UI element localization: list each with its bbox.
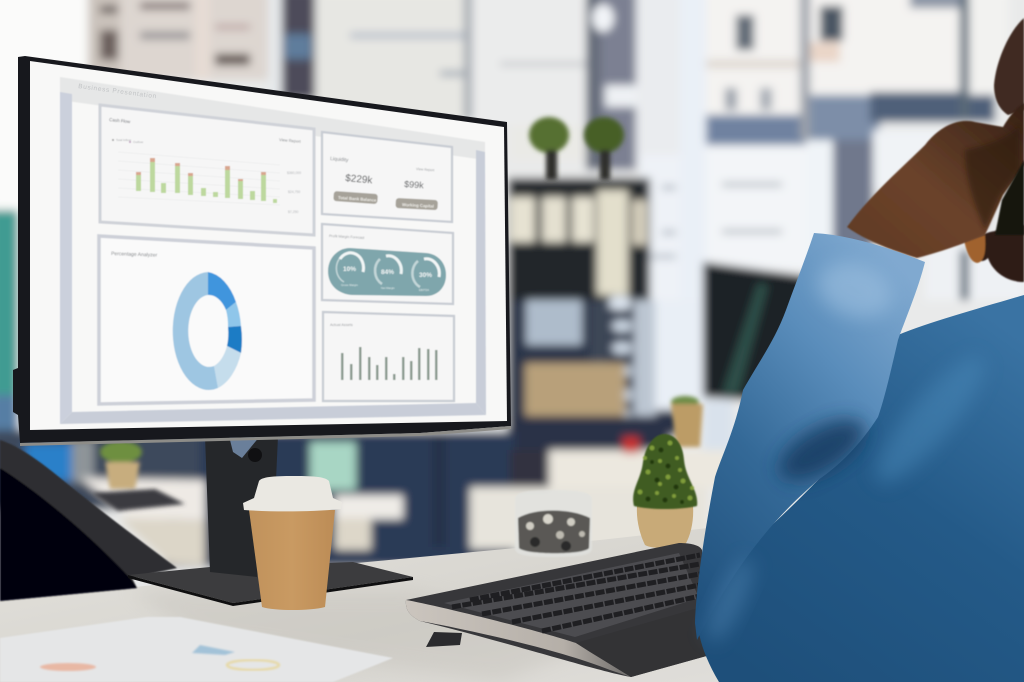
button: working capital: Working Capital bbox=[402, 202, 434, 209]
back desks bbox=[80, 478, 205, 520]
view report label: View Report bbox=[416, 167, 435, 172]
value: total bank balance: $229k bbox=[345, 173, 374, 186]
stand neck bbox=[205, 436, 278, 577]
gauge 1: Gross Margin bbox=[341, 283, 358, 287]
chart side values bbox=[287, 171, 301, 214]
legend bbox=[112, 138, 144, 144]
panel: percentage analyzer bbox=[99, 236, 314, 404]
paper donut chart bbox=[227, 660, 279, 670]
cable opening bbox=[229, 436, 260, 458]
cup body bbox=[249, 510, 335, 610]
dark keyboard on back desk bbox=[92, 489, 185, 511]
pot bbox=[637, 506, 693, 548]
cup lid bbox=[243, 476, 342, 511]
foliage bbox=[633, 434, 697, 509]
dashboard frame bbox=[60, 77, 486, 424]
wrist rest bbox=[576, 608, 710, 677]
panel: profit margin bbox=[322, 224, 453, 304]
panel: liquidity bbox=[322, 132, 452, 222]
gauge 1 bbox=[336, 253, 364, 287]
potted plants on shelf bbox=[529, 117, 624, 180]
small plant left background bbox=[100, 441, 142, 489]
bookshelf bbox=[508, 178, 650, 303]
keyboard bbox=[406, 543, 710, 677]
sleeve fold shadow bbox=[769, 407, 875, 493]
stand base bbox=[128, 562, 413, 603]
monitor bbox=[13, 56, 511, 446]
chart side values: $24,750 bbox=[288, 190, 300, 194]
dark background monitor bbox=[703, 262, 820, 405]
topiary plant in pot bbox=[633, 434, 697, 548]
hand shadow bbox=[965, 125, 1020, 230]
paper blue chart bbox=[192, 645, 235, 655]
denim sleeve bbox=[695, 233, 925, 640]
bar chart: cash flow bbox=[118, 152, 280, 205]
button: total bank balance: Total Bank Balance bbox=[338, 195, 377, 203]
gauge 1: 10% bbox=[343, 266, 356, 273]
panel: small bars bbox=[323, 312, 454, 401]
small plant right background bbox=[671, 396, 703, 447]
chart side values: $360,000 bbox=[287, 171, 301, 175]
legend: Total Inflow bbox=[116, 138, 132, 142]
legend: Outflow bbox=[133, 140, 144, 144]
monitor screen bbox=[30, 61, 507, 430]
coffee cup bbox=[243, 476, 342, 610]
gauge 2: Net Margin bbox=[381, 286, 395, 290]
view report label: View Report bbox=[279, 137, 302, 144]
gauge 3: 30% bbox=[419, 272, 432, 279]
small bars title: Actual Assets bbox=[330, 323, 353, 327]
monitor bezel bbox=[13, 56, 511, 443]
bar chart: small bars bbox=[341, 347, 438, 380]
head bbox=[994, 18, 1024, 115]
chart side values: $7,250 bbox=[288, 210, 298, 214]
lower sleeve highlight bbox=[698, 553, 762, 647]
gauge 3 bbox=[412, 259, 439, 292]
torso highlight bbox=[862, 345, 998, 495]
gauge 2 bbox=[375, 256, 401, 290]
keyboard body bbox=[406, 543, 710, 677]
sleeve highlight bbox=[811, 254, 899, 326]
neck and jaw bbox=[964, 225, 1024, 282]
gauge 2: 84% bbox=[381, 269, 394, 276]
dashboard title: Business Presentation bbox=[78, 83, 157, 100]
value: working capital: $99k bbox=[404, 179, 425, 190]
glass jar bbox=[515, 490, 592, 557]
panel: cash flow bbox=[100, 105, 314, 235]
person bbox=[695, 18, 1024, 682]
liquidity title: Liquidity bbox=[330, 156, 349, 164]
denim torso bbox=[697, 295, 1024, 682]
profit margin title: Profit Margin Forecast bbox=[329, 234, 364, 240]
keyboard foot bbox=[426, 632, 462, 647]
office chair bbox=[0, 440, 177, 601]
desk shadow under monitor base bbox=[130, 590, 600, 682]
paper orange chart bbox=[40, 663, 96, 671]
gauge 3: EBITDA bbox=[419, 288, 429, 292]
teal gauge pill bbox=[328, 248, 446, 296]
phone bbox=[995, 160, 1024, 235]
hand at ear bbox=[847, 103, 1024, 258]
donut chart bbox=[173, 272, 242, 390]
keyboard keys bbox=[444, 553, 700, 637]
monitor stand bbox=[128, 436, 413, 606]
paper report on desk bbox=[0, 617, 393, 682]
percentage analyzer title: Percentage Analyzer bbox=[111, 251, 158, 259]
office desk bbox=[0, 525, 745, 682]
keyboard front lip bbox=[406, 600, 631, 677]
tan box on shelf bbox=[525, 363, 625, 417]
chair black inner bbox=[0, 468, 137, 601]
monitor lower edge bbox=[20, 426, 511, 446]
cash flow title: Cash Flow bbox=[109, 117, 131, 124]
